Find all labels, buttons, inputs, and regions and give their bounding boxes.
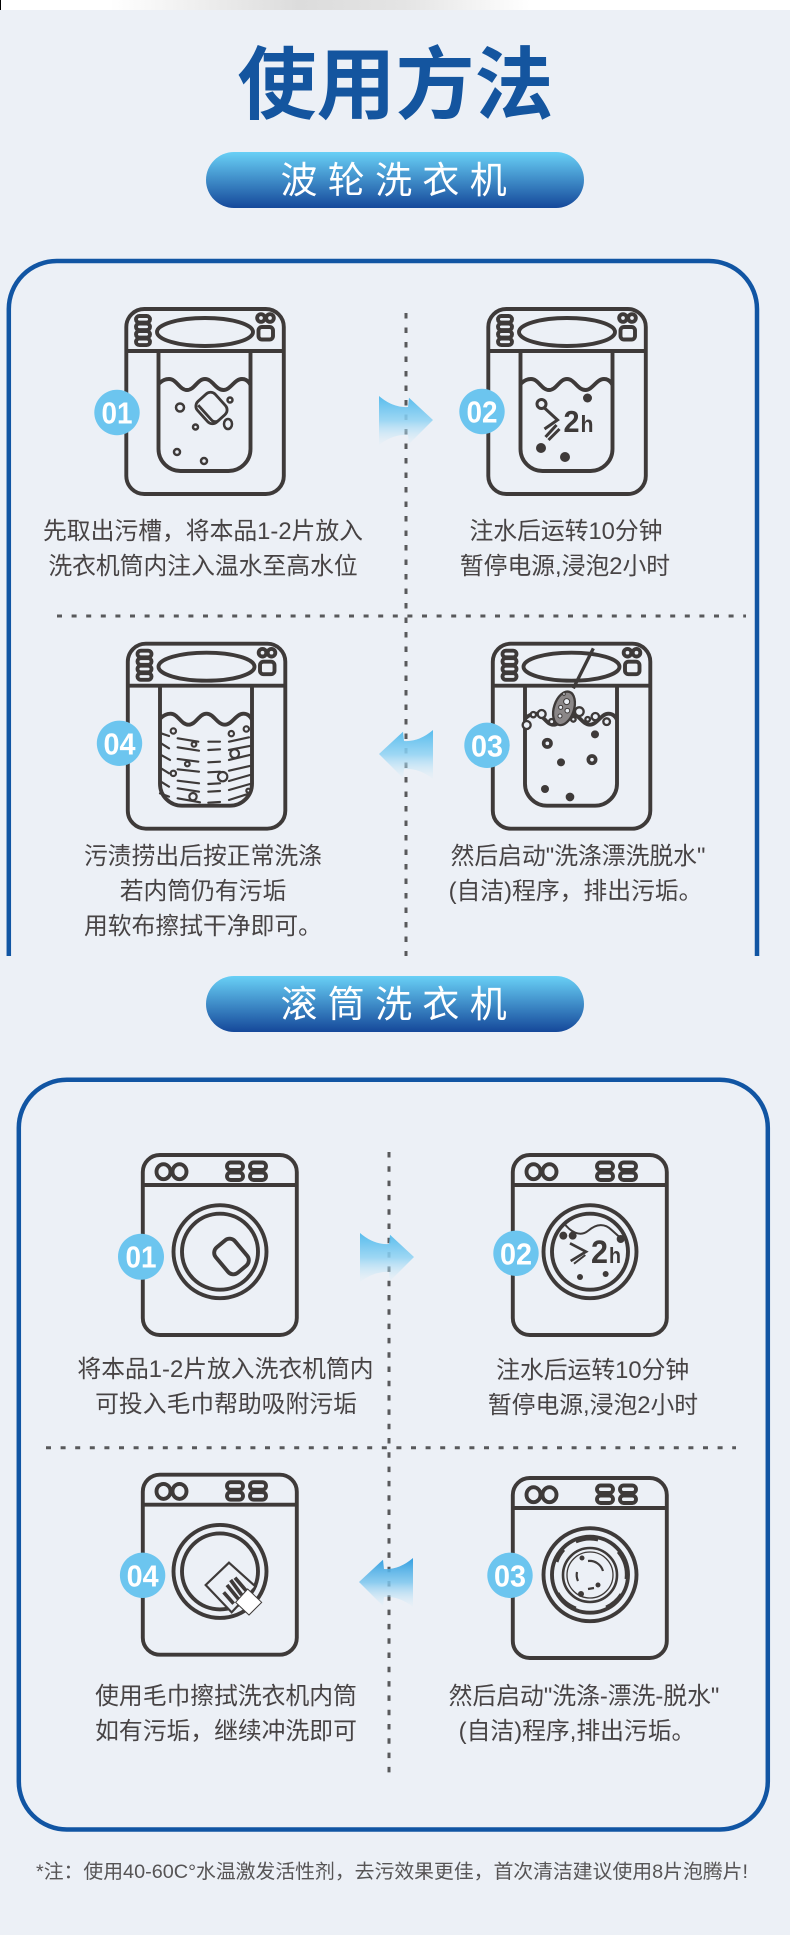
step 02 number badge: 02 — [500, 1236, 532, 1271]
step 03 text — [449, 843, 705, 905]
step 03 top-load washer icon — [493, 644, 650, 829]
vertical divider, front-load panel — [388, 1152, 390, 1778]
step 04 front-load washer icon — [143, 1475, 297, 1655]
horizontal divider, top-load panel — [57, 614, 746, 618]
panel: top-load washer — [9, 261, 757, 956]
step 04 text: 若内筒仍有污垢 — [120, 878, 286, 905]
step 01 text: 洗衣机筒内注入温水至高水位 — [48, 553, 358, 580]
step 02 text: 注水后运转10分钟 — [469, 518, 663, 545]
step 03 text: 然后启动"洗涤-漂洗-脱水" — [449, 1683, 719, 1710]
step 04 number badge — [97, 721, 142, 766]
step 01 text: 可投入毛巾帮助吸附污垢 — [95, 1391, 357, 1418]
water ripple lines and bubbles — [160, 726, 250, 803]
step 01 text — [43, 518, 363, 580]
step 04 number badge: 04 — [127, 1558, 159, 1593]
title: 使用方法 — [238, 40, 554, 130]
wave, brush and timer — [560, 1222, 624, 1280]
step 02 number badge — [493, 1231, 539, 1276]
step 02 number badge: 02 — [466, 394, 498, 430]
step 03 front-load washer icon — [513, 1478, 667, 1658]
step 04 text: 污渍捞出后按正常洗涤 — [84, 843, 322, 870]
step 03 number badge: 03 — [494, 1558, 526, 1593]
pill heading: front-load washer — [206, 976, 584, 1032]
step 02 top-load washer icon — [488, 309, 646, 494]
step 03 number badge — [464, 723, 510, 768]
step 04 text: 用软布擦拭干净即可。 — [84, 913, 322, 940]
step 04 text: 如有污垢，继续冲洗即可 — [95, 1718, 357, 1745]
step 02 text: 暂停电源,浸泡2小时 — [488, 1392, 698, 1419]
step 02 top-load washer icon: 2 — [564, 404, 580, 439]
drum rings and swirling water — [557, 1539, 626, 1608]
step 04 text — [95, 1683, 357, 1745]
tablet — [211, 1236, 252, 1277]
panel: front-load washer — [19, 1080, 768, 1830]
step 04 text — [84, 843, 322, 940]
step 02 front-load washer icon: h — [609, 1243, 621, 1268]
arrow: step 01 to 02 — [379, 396, 433, 445]
step 01 number badge — [118, 1234, 164, 1280]
arrow: step 03 to 04 — [359, 1558, 413, 1607]
step 02 text: 暂停电源,浸泡2小时 — [460, 553, 670, 580]
step 01 top-load washer icon — [126, 309, 284, 494]
step 04 text: 使用毛巾擦拭洗衣机内筒 — [95, 1683, 357, 1710]
vertical divider, top-load panel — [404, 313, 408, 956]
footnote: *注：使用40-60C°水温激发活性剂，去污效果更佳，首次清洁建议使用8片泡腾片! — [36, 1861, 748, 1883]
step 02 text: 注水后运转10分钟 — [496, 1357, 689, 1384]
step 03 text: 然后启动"洗涤漂洗脱水" — [451, 843, 705, 870]
step 03 text: (自洁)程序,排出污垢。 — [459, 1718, 695, 1745]
step 01 text: 将本品1-2片放入洗衣机筒内 — [77, 1356, 374, 1383]
step 01 text — [77, 1356, 374, 1418]
step 03 number badge: 03 — [471, 728, 503, 763]
step 02 front-load washer icon — [513, 1155, 667, 1335]
step 02 text — [488, 1357, 698, 1419]
foam, spoon and dirt — [523, 648, 610, 801]
horizontal divider, front-load panel — [46, 1446, 736, 1449]
cloth and hand — [206, 1563, 262, 1615]
step 04 number badge: 04 — [104, 726, 136, 761]
step 04 number badge — [120, 1553, 165, 1598]
top cropped strip — [0, 0, 790, 10]
step 03 text: (自洁)程序，排出污垢。 — [449, 878, 702, 905]
step 02 text — [460, 518, 670, 580]
arrow: step 03 to 04 — [379, 730, 433, 779]
brush and timer — [537, 400, 560, 440]
step 01 number badge: 01 — [102, 396, 132, 430]
step 03 number badge — [487, 1553, 533, 1598]
step 04 top-load washer icon — [128, 644, 285, 829]
tablet — [193, 390, 230, 426]
step 03 text — [449, 1683, 719, 1745]
step 01 number badge — [94, 390, 140, 435]
step 02 front-load washer icon: 2 — [591, 1234, 608, 1270]
pill heading: front-load washer: 滚筒洗衣机 — [280, 984, 517, 1025]
step 01 text: 先取出污槽，将本品1-2片放入 — [43, 518, 363, 545]
step 01 number badge: 01 — [126, 1240, 156, 1275]
step 02 number badge — [459, 389, 505, 434]
arrow: step 01 to 02 — [360, 1233, 414, 1282]
step 02 top-load washer icon: h — [580, 411, 594, 437]
pill heading: top-load washer: 波轮洗衣机 — [280, 160, 517, 201]
pill heading: top-load washer — [206, 152, 584, 208]
step 01 front-load washer icon — [143, 1155, 297, 1335]
